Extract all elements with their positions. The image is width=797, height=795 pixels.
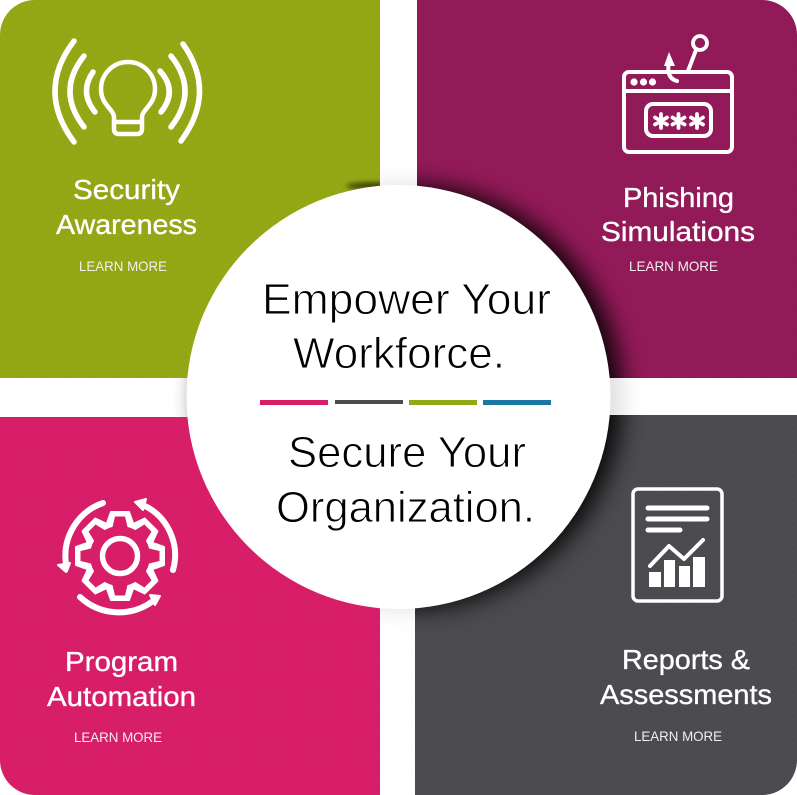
headline: secure your organization: Secure Your	[288, 428, 526, 477]
icon: report with chart	[633, 489, 722, 601]
heading: security awareness	[56, 174, 197, 240]
headline: empower your workforce	[262, 275, 551, 378]
headline: empower your workforce: Empower Your	[262, 275, 551, 324]
link: learn more: LEARN MORE	[74, 729, 162, 745]
heading: phishing simulations: Phishing	[623, 182, 734, 213]
headline: empower your workforce: Workforce.	[293, 329, 505, 378]
heading: program automation: Automation	[47, 681, 196, 712]
link: learn more: LEARN MORE	[634, 728, 722, 744]
circle shadow	[198, 185, 622, 609]
headline: secure your organization	[276, 428, 535, 532]
icon: gear with cycle arrows	[58, 499, 175, 612]
link: learn more: LEARN MORE	[629, 258, 718, 274]
heading: phishing simulations: Simulations	[601, 216, 755, 247]
center circle	[186, 185, 610, 609]
heading: reports and assessments	[600, 644, 772, 710]
heading: reports and assessments: Reports &	[622, 644, 750, 675]
gaps: faded shadow on white	[380, 0, 797, 795]
heading: program automation: Program	[65, 646, 178, 677]
panel: security awareness	[0, 0, 380, 378]
link: learn more: LEARN MORE	[79, 258, 167, 274]
icon: phishing hook on browser window	[624, 36, 732, 152]
headline: secure your organization: Organization.	[276, 483, 535, 532]
heading: phishing simulations	[601, 182, 755, 247]
panel: phishing simulations	[417, 0, 797, 378]
divider: four colour bars	[260, 400, 551, 405]
panel: program automation	[0, 417, 380, 795]
heading: program automation	[47, 646, 196, 712]
panel: reports and assessments	[415, 415, 797, 795]
heading: reports and assessments: Assessments	[600, 679, 772, 710]
heading: security awareness: Awareness	[56, 209, 197, 240]
heading: security awareness: Security	[73, 174, 180, 205]
icon: light bulb with signal waves	[55, 41, 200, 142]
